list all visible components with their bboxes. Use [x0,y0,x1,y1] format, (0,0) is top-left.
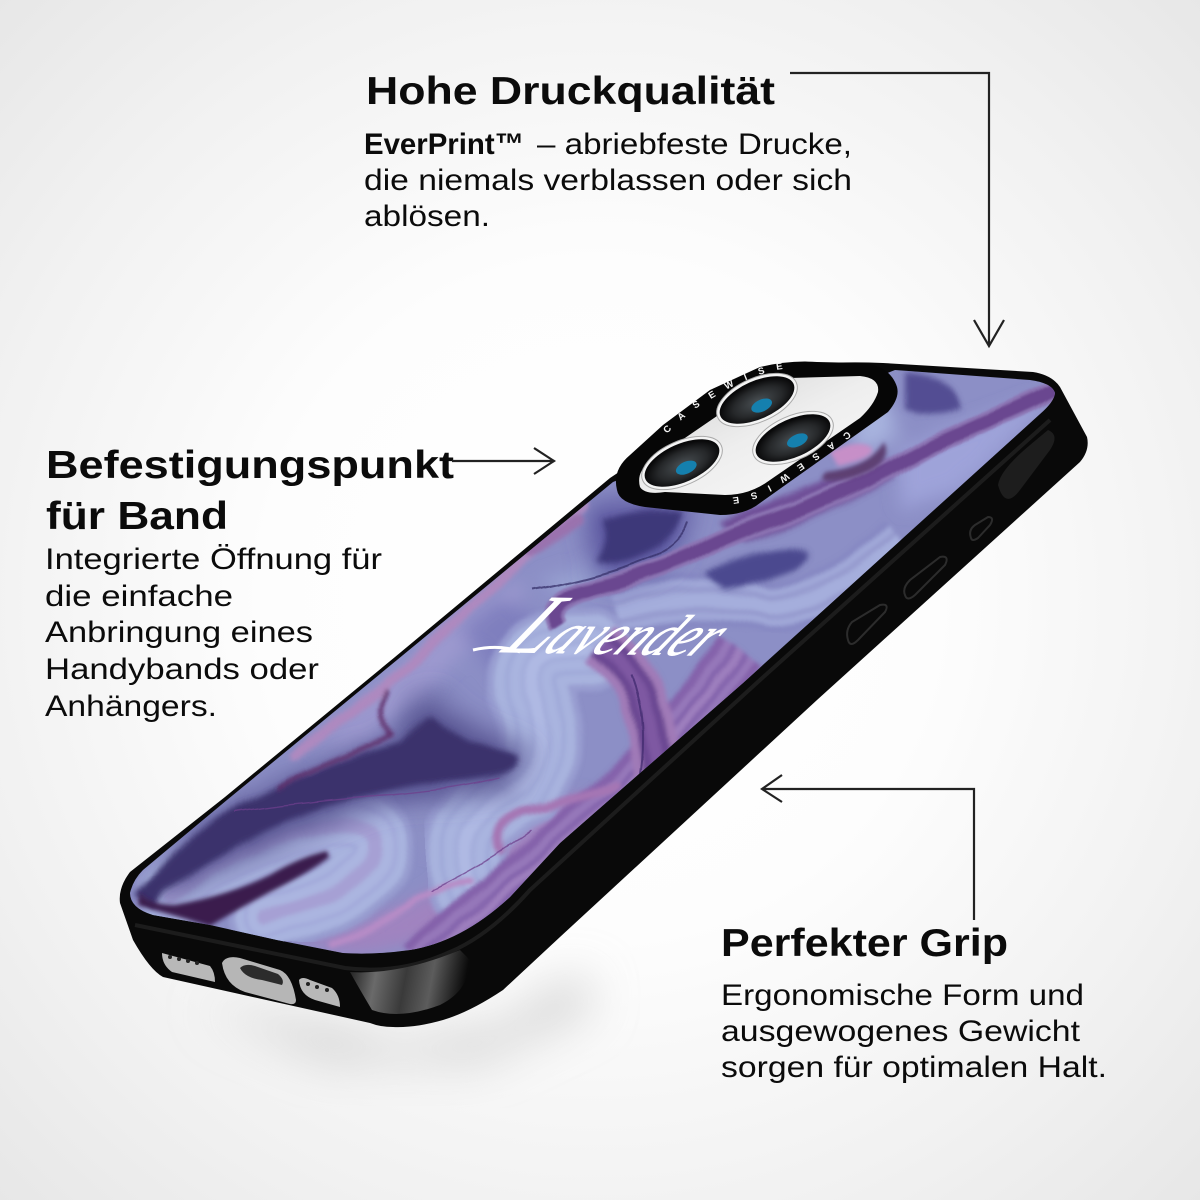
body text: sorgen für optimalen Halt. [721,1051,1107,1084]
side bevel [135,420,1050,970]
purple vein from print corner [720,460,895,542]
case body [120,362,1088,1027]
lens top [709,362,805,438]
phone drop shadow [200,975,590,1058]
body text: ausgewogenes Gewicht [721,1015,1081,1048]
camera window [639,376,878,495]
charging port [222,957,296,1004]
body text [364,128,852,233]
callout: Hohe Druckqualität [364,70,852,233]
body text: EverPrint™ [364,128,524,161]
heading: Befestigungspunkt [46,444,454,487]
thin contour lines [235,520,687,890]
arrow: to print surface [790,73,1004,346]
ring lettering top: CASEWISE [664,363,782,432]
purple band under script [420,645,740,965]
nested right field [615,540,900,612]
body text: ablösen. [364,200,490,233]
body text: – abriebfeste Drucke, [537,128,852,161]
marble print [130,370,1055,954]
side buttons [847,517,992,644]
soft colour zones [290,398,1050,955]
dark maroon stripe [138,851,329,926]
purple vein stroke [554,388,1060,625]
phone case [120,362,1088,1028]
body text: die niemals verblassen oder sich [364,164,852,197]
bottom right speaker [299,978,340,1007]
body text [45,543,382,723]
body text: Integrierte Öffnung für [45,543,382,576]
arrow: to lanyard point [452,448,554,474]
pink and dark accent at camera [822,442,886,481]
body text: Ergonomische Form und [721,979,1084,1012]
lower pink streaks [280,505,615,945]
camera ring [616,362,898,515]
nested lobe around stripe [172,824,376,915]
heading [46,444,454,538]
camera island [616,362,898,515]
body text: Handybands oder [45,653,319,686]
nested central column [464,650,590,885]
lanyard attachment point [998,430,1055,499]
bottom left speaker [162,953,215,982]
ring lettering bottom: CASEWISE [732,432,850,504]
callout: Befestigungspunkt [45,444,454,723]
body text [721,979,1107,1084]
dark navy swirl bands [132,372,962,908]
heading: für Band [46,495,228,538]
heading: Perfekter Grip [721,922,1008,965]
lens right [745,400,841,476]
callout: Perfekter Grip [721,922,1107,1084]
bottom corner gloss [350,950,470,1014]
dark navy halo [150,500,695,905]
body text: Anhängers. [45,690,217,723]
lens left [634,425,730,501]
brand script: Lavender: Lavender [484,578,765,674]
body text: Anbringung eines [45,616,313,649]
arrow: to grip edge [762,775,974,920]
body text: die einfache [45,580,233,613]
heading: Hohe Druckqualität [366,70,775,113]
